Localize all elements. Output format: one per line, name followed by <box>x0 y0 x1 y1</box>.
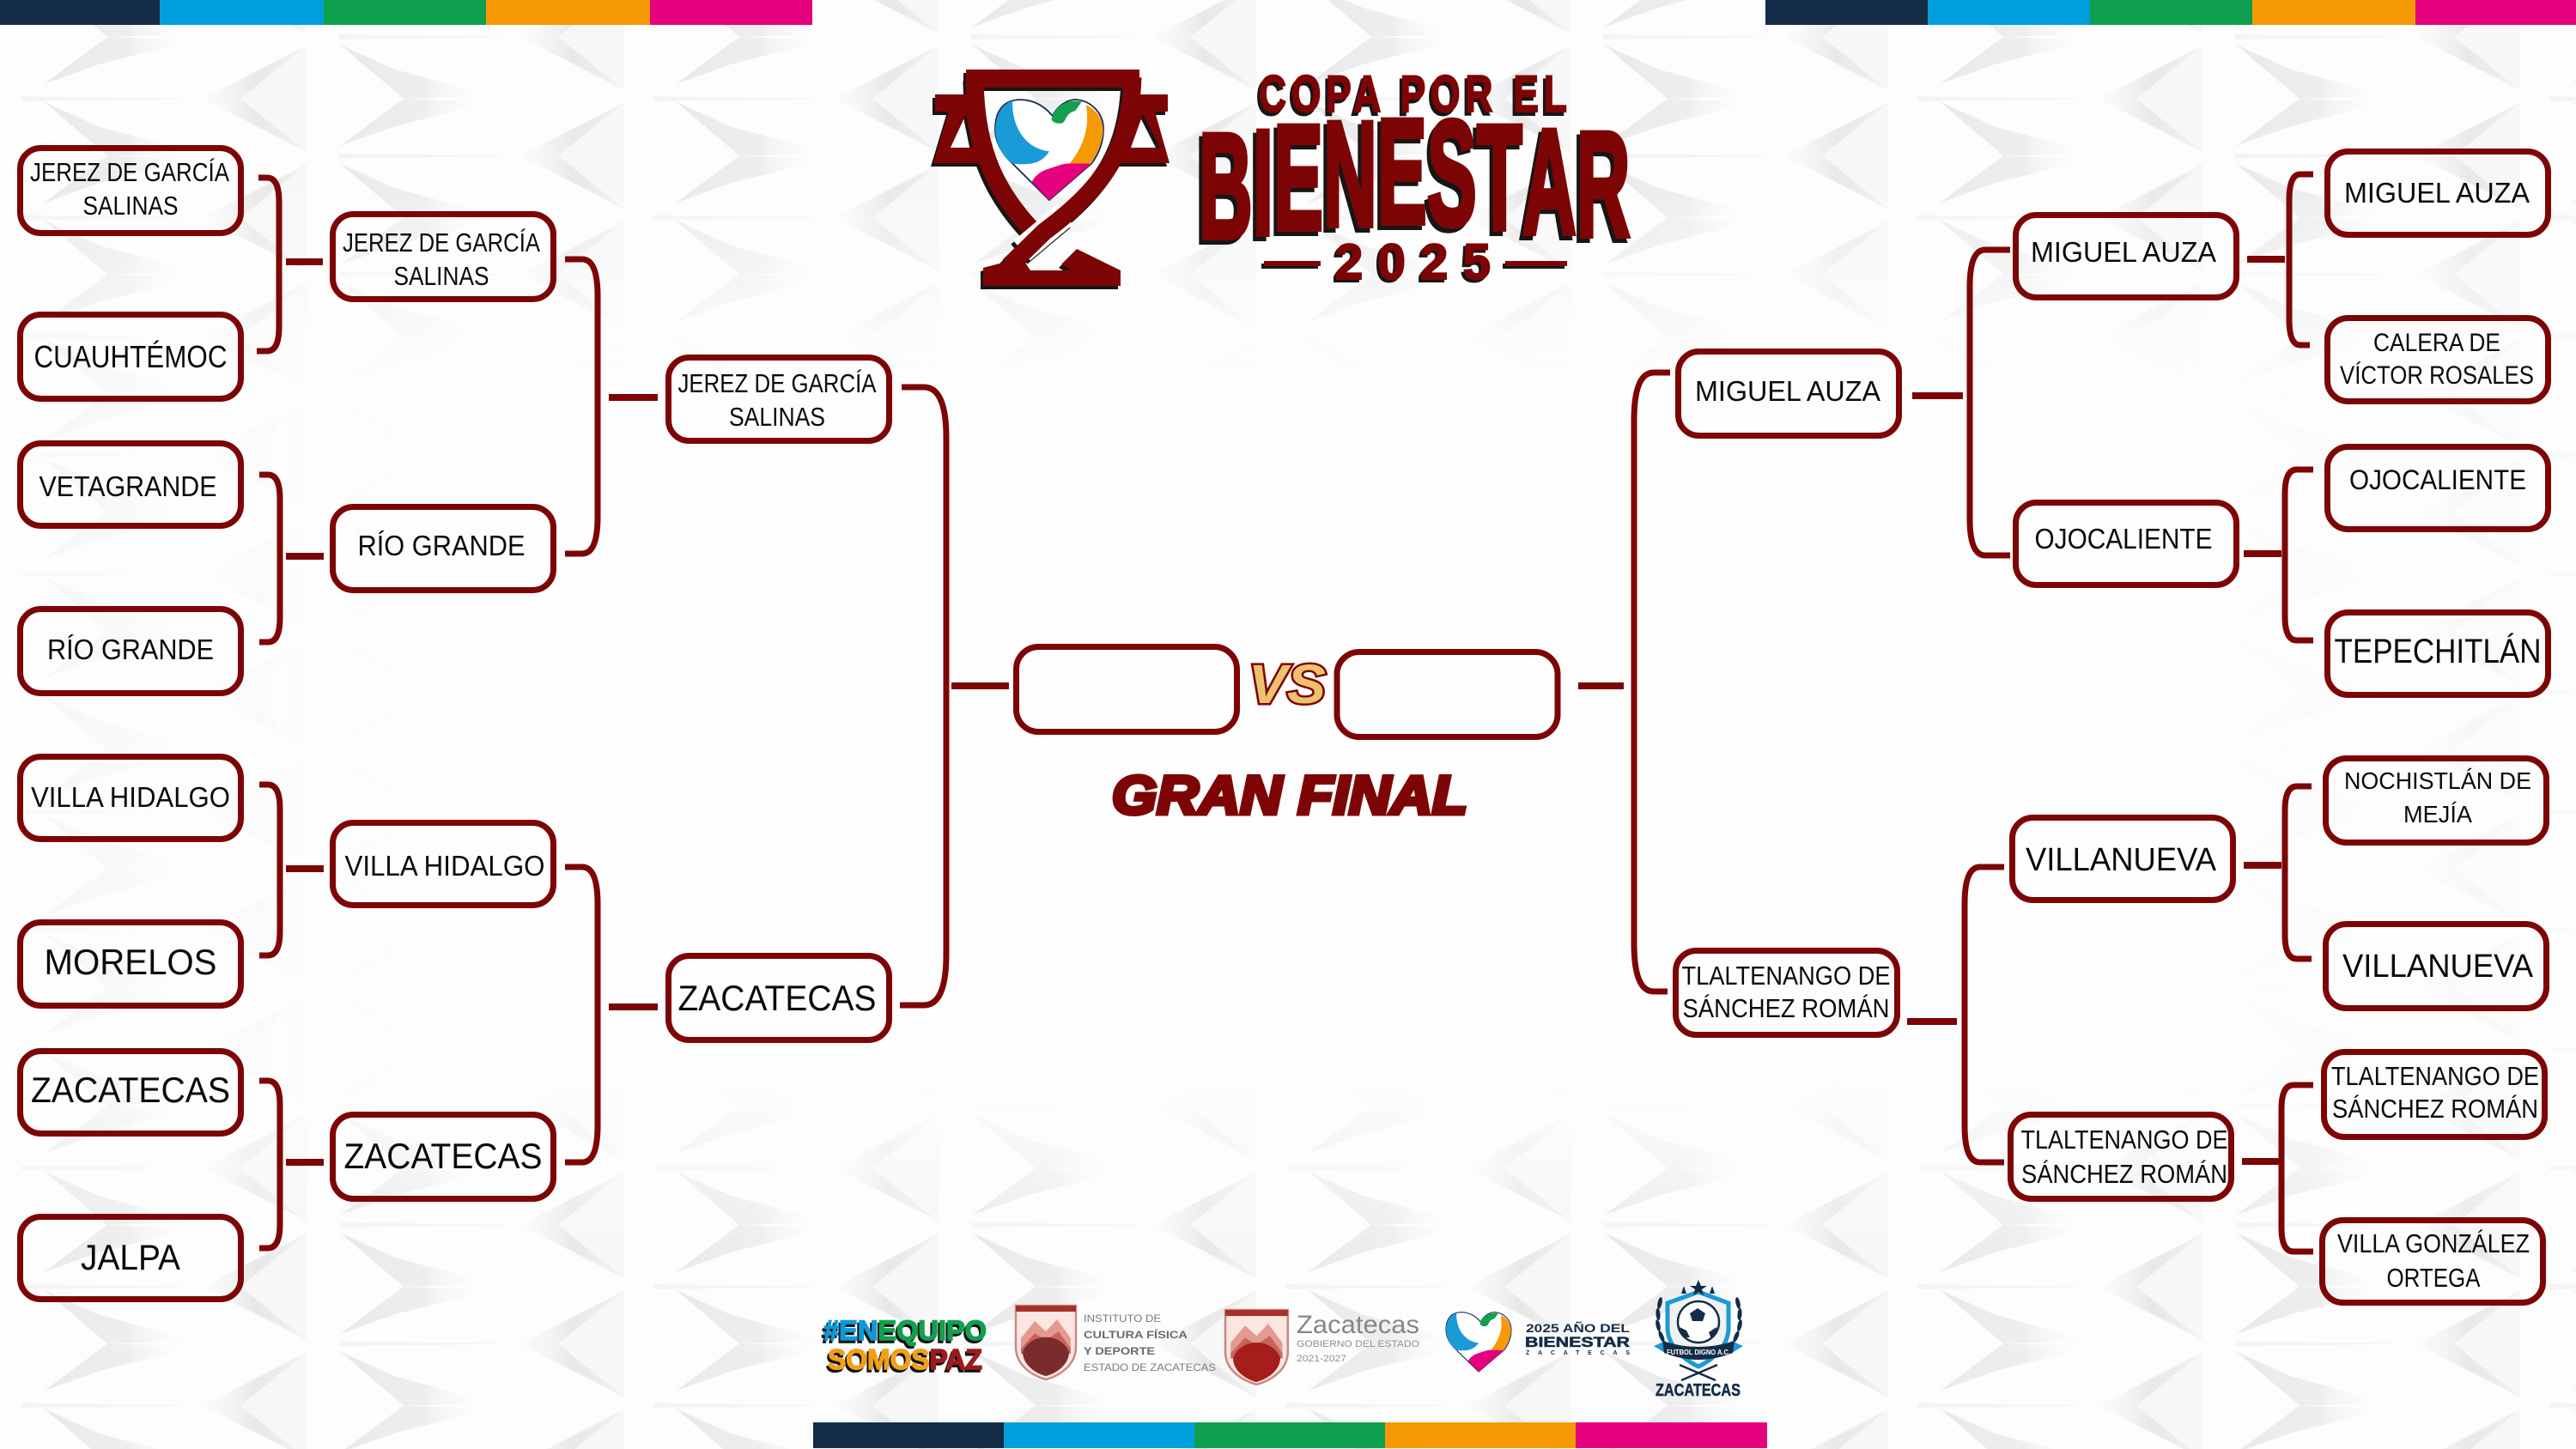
title: copa por el: COPA POR EL <box>1259 66 1567 124</box>
bracket: round 1 left group 2 <box>259 475 324 642</box>
footer logo: instituto de cultura física y deporte <box>1016 1306 1216 1379</box>
team box: Zacatecas, left semifinal <box>668 956 890 1040</box>
footer logo: futbol digno zacatecas: ZACATECAS <box>1656 1381 1741 1400</box>
team box: Nochistlán de Mejía: NOCHISTLÁN DE <box>2344 767 2531 794</box>
team box: Jerez de García Salinas, left semifinal: SALINAS <box>729 403 825 432</box>
team box: Ojocaliente <box>2327 446 2549 529</box>
final box left <box>1017 647 1236 731</box>
team box: Cuauhtémoc <box>21 314 240 398</box>
footer logo: en equipo somos paz: #ENEQUIPO <box>823 1315 987 1346</box>
team box: Tlaltenango de Sánchez Román: TLALTENANGO DE <box>2331 1062 2539 1091</box>
footer logo: futbol digno zacatecas: FUTBOL DIGNO A.C. <box>1667 1349 1730 1356</box>
bottom colour bar <box>813 1422 1767 1448</box>
footer logo: 2025 año del bienestar <box>1446 1313 1631 1372</box>
footer logo: instituto de cultura física y deporte: INSTITUTO DE <box>1084 1313 1161 1325</box>
bracket: right round 2 lower <box>1907 867 2004 1162</box>
team box: Tlaltenango de Sánchez Román, right semifinal: SÁNCHEZ ROMÁN <box>1683 993 1889 1023</box>
vs label: VS <box>1249 653 1326 715</box>
final box right <box>1337 652 1558 737</box>
top left colour bar <box>0 0 812 25</box>
team box: Calera de Víctor Rosales: CALERA DE <box>2373 329 2500 357</box>
team box: Jerez de García Salinas, left round 2 <box>333 215 553 299</box>
team box: Zacatecas, left round 2: ZACATECAS <box>343 1136 543 1176</box>
team box: Zacatecas, left semifinal: ZACATECAS <box>678 978 876 1018</box>
footer logo: gobierno de zacatecas: GOBIERNO DEL ESTADO <box>1297 1339 1419 1349</box>
team box: Villa Hidalgo: VILLA HIDALGO <box>31 781 230 813</box>
footer logo: instituto de cultura física y deporte: ESTADO DE ZACATECAS <box>1084 1361 1216 1373</box>
team box: Villa González Ortega: ORTEGA <box>2387 1264 2481 1293</box>
team box: Jerez de García Salinas, left semifinal: JEREZ DE GARCÍA <box>678 368 877 398</box>
bracket: round 1 left group 3 <box>259 785 324 955</box>
top right colour bar <box>1765 0 2576 25</box>
team box: Miguel Auza, right semifinal <box>1678 352 1899 436</box>
team box: Villanueva: VILLANUEVA <box>2342 949 2534 985</box>
team box: Tlaltenango de Sánchez Román, right round 2: TLALTENANGO DE <box>2021 1125 2227 1155</box>
team box: Morelos <box>21 922 240 1006</box>
team box: Villa Hidalgo <box>21 757 240 840</box>
team box: Tlaltenango de Sánchez Román, right round 2 <box>2011 1114 2231 1198</box>
footer logo: en equipo somos paz <box>823 1315 987 1375</box>
team box: Jerez de García Salinas, left round 2: SALINAS <box>393 262 489 291</box>
team box: Zacatecas, left round 2 <box>333 1114 553 1198</box>
team box: Villanueva, right round 2 <box>2013 817 2233 900</box>
team box: Vetagrande <box>21 443 240 525</box>
team box: Jerez de García Salinas, left round 1: SALINAS <box>82 191 179 221</box>
team box: Tlaltenango de Sánchez Román, right semifinal <box>1676 951 1898 1035</box>
bracket: round 2 left lower <box>565 867 658 1162</box>
footer logo: gobierno de zacatecas: 2021-2027 <box>1297 1354 1346 1364</box>
team box: Ojocaliente: OJOCALIENTE <box>2349 464 2526 495</box>
team box: Miguel Auza, right semifinal: MIGUEL AUZA <box>1695 375 1880 407</box>
team box: Jalpa <box>21 1217 240 1300</box>
bracket: left semifinal to final <box>900 387 1009 1005</box>
team box: Villanueva, right round 2: VILLANUEVA <box>2026 842 2217 878</box>
team box: Miguel Auza, right round 1 <box>2327 151 2549 235</box>
team box: Morelos: MORELOS <box>45 942 216 982</box>
team box: Jerez de García Salinas, left semifinal <box>668 357 890 441</box>
team box: Tlaltenango de Sánchez Román, right semifinal: TLALTENANGO DE <box>1681 961 1891 991</box>
team box: Tlaltenango de Sánchez Román <box>2324 1052 2545 1137</box>
title: 2025: 2025 <box>1335 234 1491 290</box>
team box: Calera de Víctor Rosales: VÍCTOR ROSALES <box>2340 361 2534 390</box>
team box: Jalpa: JALPA <box>81 1237 180 1277</box>
footer logo: instituto de cultura física y deporte: Y DEPORTE <box>1084 1345 1155 1357</box>
bracket: right semifinal to final <box>1578 373 1670 991</box>
team box: Río Grande <box>21 609 240 694</box>
footer logo: instituto de cultura física y deporte: CULTURA FÍSICA <box>1084 1328 1188 1341</box>
team box: Nochistlán de Mejía: MEJÍA <box>2403 801 2472 828</box>
team box: Tepechitlán: TEPECHITLÁN <box>2334 632 2542 670</box>
team box: Río Grande, left round 2 <box>333 506 553 591</box>
team box: Río Grande, left round 2: RÍO GRANDE <box>357 530 526 561</box>
bracket: round 1 left group 4 <box>259 1081 324 1248</box>
team box: Miguel Auza, right round 2 <box>2016 215 2236 297</box>
team box: Villa González Ortega: VILLA GONZÁLEZ <box>2337 1228 2530 1258</box>
bracket: right round 1 group 1 <box>2247 174 2313 345</box>
bracket: right round 1 group 2 <box>2244 470 2313 640</box>
team box: Calera de Víctor Rosales <box>2327 318 2549 402</box>
bracket: right round 1 group 3 <box>2244 786 2312 959</box>
team box: Ojocaliente, right round 2: OJOCALIENTE <box>2035 523 2212 555</box>
team box: Nochistlán de Mejía <box>2325 759 2547 843</box>
team box: Villa Hidalgo, left round 2 <box>333 822 553 905</box>
team box: Villa González Ortega <box>2322 1221 2543 1303</box>
team box: Jerez de García Salinas, left round 1 <box>21 148 240 233</box>
team box: Río Grande: RÍO GRANDE <box>47 634 214 665</box>
title: bienestar: BIENESTAR <box>1199 88 1631 270</box>
heading: gran final: GRAN FINAL <box>1112 766 1467 826</box>
footer logo: futbol digno zacatecas <box>1654 1280 1743 1400</box>
footer logo: gobierno de zacatecas: Zacatecas <box>1297 1311 1419 1339</box>
bracket: right round 2 upper <box>1912 250 2010 555</box>
footer logo: 2025 año del bienestar: ZACATECAS <box>1526 1350 1630 1356</box>
footer logo: en equipo somos paz: SOMOSPAZ <box>828 1343 982 1375</box>
footer logo: gobierno de zacatecas <box>1225 1310 1419 1385</box>
team box: Zacatecas: ZACATECAS <box>31 1070 230 1110</box>
team box: Villanueva <box>2325 924 2547 1008</box>
footer logo: 2025 año del bienestar: BIENESTAR <box>1525 1334 1630 1350</box>
team box: Jerez de García Salinas, left round 1: JEREZ DE GARCÍA <box>30 157 230 187</box>
team box: Miguel Auza, right round 2: MIGUEL AUZA <box>2031 236 2216 268</box>
footer logo: 2025 año del bienestar: 2025 AÑO DEL <box>1526 1320 1631 1335</box>
team box: Vetagrande: VETAGRANDE <box>39 470 216 502</box>
bracket: right round 1 group 4 <box>2242 1085 2313 1252</box>
team box: Zacatecas <box>21 1051 240 1133</box>
team box: Villa Hidalgo, left round 2: VILLA HIDALGO <box>345 850 544 882</box>
icon: trophy logo <box>933 70 1170 286</box>
title: 2025 <box>1264 234 1567 290</box>
team box: Tepechitlán <box>2327 613 2549 695</box>
team box: Jerez de García Salinas, left round 2: JEREZ DE GARCÍA <box>343 227 541 258</box>
team box: Tlaltenango de Sánchez Román: SÁNCHEZ ROMÁN <box>2332 1094 2538 1124</box>
team box: Cuauhtémoc: CUAUHTÉMOC <box>34 339 227 374</box>
team box: Ojocaliente, right round 2 <box>2016 503 2236 585</box>
team box: Miguel Auza, right round 1: MIGUEL AUZA <box>2344 177 2530 209</box>
bracket: round 2 left upper <box>565 259 658 554</box>
bracket: round 1 left group 1 <box>257 178 323 351</box>
team box: Tlaltenango de Sánchez Román, right round 2: SÁNCHEZ ROMÁN <box>2021 1159 2227 1189</box>
